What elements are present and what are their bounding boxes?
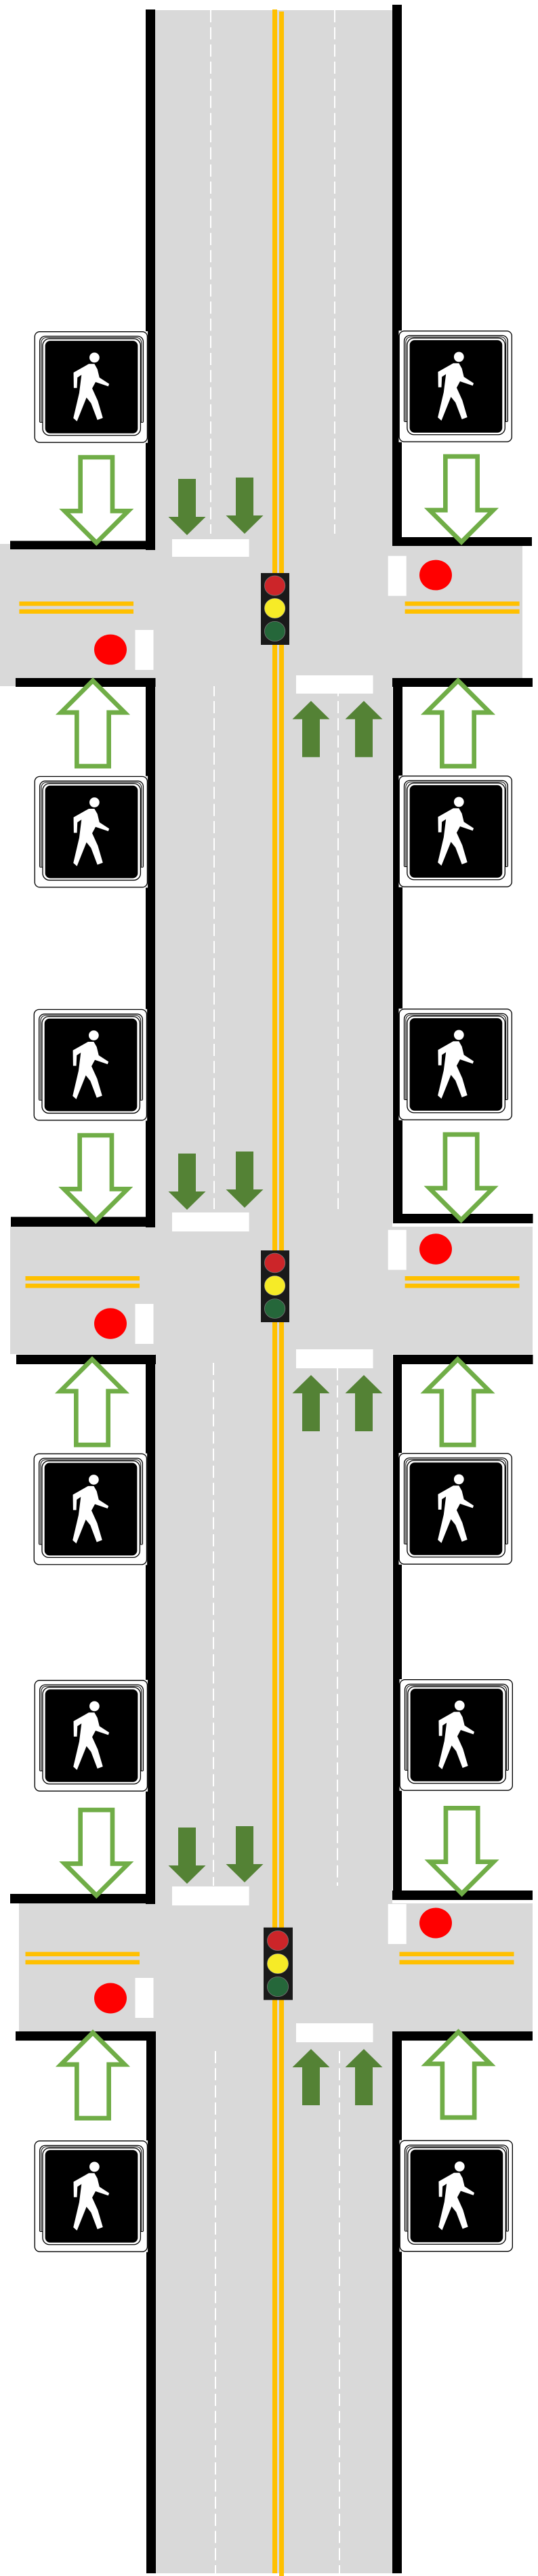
cross street 1 surface	[0, 544, 522, 686]
intersection 3 stop bars	[136, 1886, 407, 2042]
traffic signal 2	[261, 1250, 289, 1322]
pedestrian arrows, intersection 3	[61, 1808, 494, 2118]
vehicle arrows, intersection 3	[168, 1826, 382, 2105]
traffic signal 3	[264, 1928, 293, 2000]
cross street 2 surface	[10, 1227, 533, 1354]
traffic signal 1	[261, 573, 289, 645]
cross street yellow center lines	[19, 601, 520, 1964]
red stop dots	[94, 560, 452, 2013]
cross street 3 surface	[19, 1903, 533, 2031]
intersection 2 stop bars	[136, 1212, 407, 1368]
intersection 1 stop bars	[136, 539, 407, 694]
vehicle arrows, intersection 1	[168, 478, 382, 757]
pedestrian arrows, intersection 1	[61, 457, 493, 766]
main north-south road surface	[155, 10, 392, 2573]
vehicle arrows, intersection 2	[168, 1152, 382, 1431]
walk signals, intersection 1	[35, 331, 512, 888]
pedestrian arrows, intersection 2	[60, 1135, 493, 1445]
walk signals, intersection 3	[35, 1679, 513, 2252]
double yellow center line	[272, 9, 284, 2576]
dashed lane lines	[211, 10, 339, 2573]
walk signals, intersection 2	[34, 1009, 512, 1565]
